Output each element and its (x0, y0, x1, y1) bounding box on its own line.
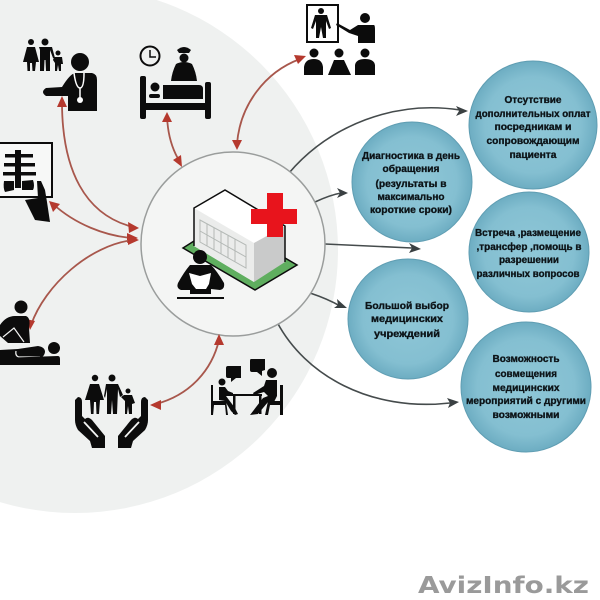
text: combining activities: медицинских (492, 382, 560, 394)
text: no extra payments: Отсутствие (504, 94, 562, 106)
icon: lecture (304, 5, 375, 75)
text: wide choice (365, 300, 449, 340)
icon: massage (0, 300, 60, 365)
text: meeting and transfer (475, 227, 582, 280)
central circle (141, 152, 325, 336)
text: no extra payments: дополнительных оплат (476, 108, 590, 120)
text: no extra payments (476, 94, 590, 161)
background circle (0, 0, 338, 513)
text: combining activities: мероприятий с другими (466, 395, 586, 407)
text: wide choice: Большой выбор (365, 300, 449, 312)
red two-way arrows (26, 55, 306, 410)
text: wide choice: медицинских (371, 313, 443, 325)
text: no extra payments: пациента (510, 149, 557, 161)
text: meeting and transfer: ,трансфер ,помощь в (476, 241, 582, 253)
icon: hospital (183, 190, 297, 290)
text: meeting and transfer: Встреча ,размещение (475, 227, 581, 239)
text: same-day diagnostics (362, 150, 461, 216)
text: no extra payments: сопровождающим (486, 135, 580, 147)
icon: reader (177, 250, 224, 299)
text: combining activities: возможными (492, 409, 560, 421)
icon: family in hands (75, 374, 148, 448)
text: same-day diagnostics: Диагностика в день (362, 150, 461, 162)
icon: x-ray in hand (0, 143, 52, 222)
text: meeting and transfer: разрешении (499, 254, 559, 266)
icon: nurse, clock and bed (140, 46, 211, 119)
text: same-day diagnostics: короткие сроки) (370, 204, 452, 216)
icon: family and doctor (23, 38, 97, 111)
text: same-day diagnostics: (результаты в (376, 178, 447, 190)
dark arrows to benefits (277, 106, 468, 408)
benefit circles (348, 61, 597, 452)
text: combining activities: Возможность (492, 353, 560, 365)
text: same-day diagnostics: максимально (378, 191, 444, 203)
text: meeting and transfer: различных вопросов (476, 268, 580, 280)
text: same-day diagnostics: обращения (382, 163, 440, 175)
text: wide choice: учреждений (374, 328, 440, 340)
text: combining activities: совмещения (495, 368, 557, 380)
icon: consultation (211, 359, 283, 415)
icon: red cross (251, 193, 297, 237)
text: no extra payments: посредникам и (494, 121, 572, 133)
watermark: AvizInfo.kz (418, 573, 589, 599)
text: combining activities (466, 353, 586, 421)
